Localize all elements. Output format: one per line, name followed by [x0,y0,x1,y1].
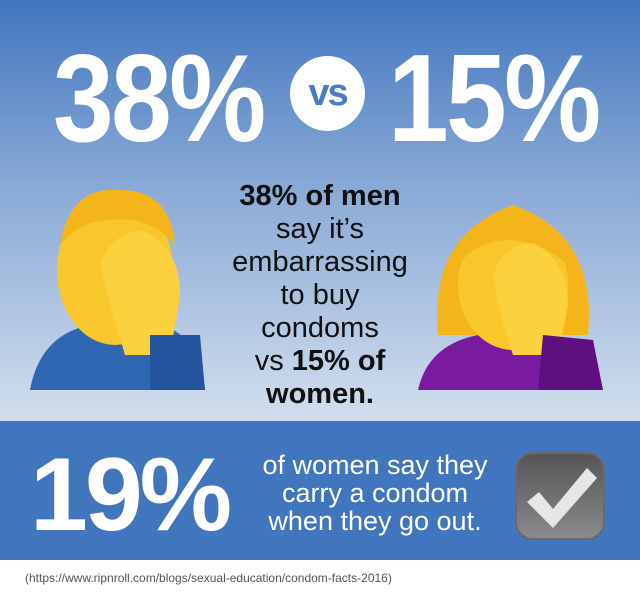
text: carry a condom [262,450,488,536]
icon: woman facepalm [418,205,603,390]
source footer: (https://www.ripnroll.com/blogs/sexual-education/condom-facts-2016) [25,571,392,585]
title: 38%: 38% [53,30,263,168]
icon: man facepalm [30,190,205,390]
text block: men vs women: women. [266,378,374,410]
text block: men vs women: embarrassing [232,246,408,278]
icon: vs circle: vs [308,72,347,114]
title: 15%: 15% [388,30,598,168]
text: carry a condom: carry a condom [282,478,468,508]
text block: men vs women [232,180,408,410]
text block: men vs women: 38% of men [239,180,401,212]
icon: vs circle [290,56,365,131]
background gradient [0,0,640,421]
text block: men vs women: to buy [280,279,360,311]
text: carry a condom: of women say they [262,450,488,480]
text block: men vs women: condoms [261,312,379,344]
text block: men vs women: vs 15% of [255,345,385,377]
stat: 19%: 19% [30,437,229,553]
text: carry a condom: when they go out. [268,506,482,536]
icon: checkbox [515,452,605,540]
text block: men vs women: say it’s [276,213,364,245]
panel: 19% band [0,421,640,560]
